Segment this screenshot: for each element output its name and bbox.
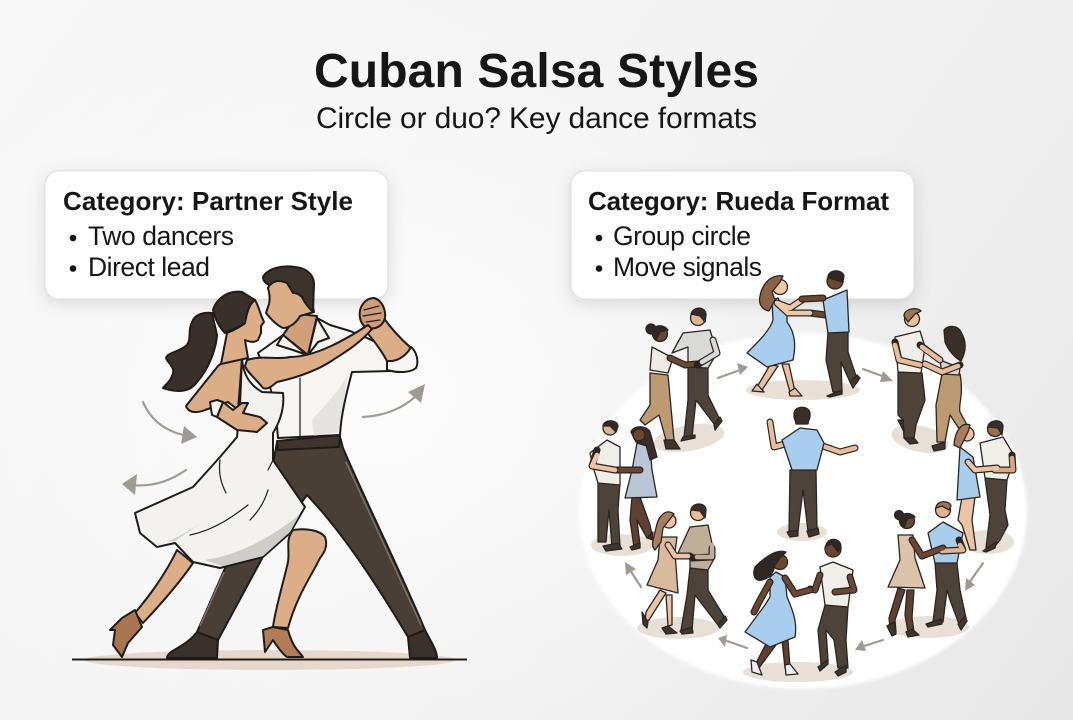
title: Cuban Salsa Styles bbox=[314, 45, 759, 98]
man hand on her waist bbox=[210, 400, 267, 432]
subtitle: Circle or duo? Key dance formats bbox=[316, 102, 757, 135]
bullet list: Move signals bbox=[613, 252, 762, 282]
couple: bottom left bbox=[637, 504, 727, 639]
couple: top centre bbox=[746, 271, 860, 400]
panel: rueda format card bbox=[571, 171, 914, 299]
card heading: Category: Partner Style bbox=[63, 186, 353, 216]
bullet list bbox=[596, 221, 762, 282]
man shirt bbox=[258, 318, 390, 438]
bullet list: Two dancers bbox=[88, 221, 234, 251]
woman dress bbox=[135, 358, 305, 568]
floor shadow and line bbox=[72, 650, 467, 670]
bullet list: Direct lead bbox=[88, 252, 210, 282]
bullet list: Group circle bbox=[613, 221, 751, 251]
illustration: partner couple bbox=[72, 266, 467, 670]
couple: top left bbox=[640, 308, 727, 457]
woman face and hair bbox=[213, 292, 264, 364]
leader in centre bbox=[770, 407, 855, 541]
card heading: Category: Rueda Format bbox=[588, 186, 889, 216]
woman legs and heels bbox=[110, 529, 326, 657]
illustration: rueda circle bbox=[579, 271, 1027, 689]
man neck, collar, face and hair bbox=[263, 266, 329, 355]
couple: top right bbox=[889, 309, 967, 458]
couple: left bbox=[590, 421, 657, 556]
couple: right lower bbox=[887, 502, 969, 638]
woman extended arm bbox=[245, 325, 372, 389]
couple: right upper bbox=[954, 421, 1015, 554]
man raised forearm and clasped hands bbox=[360, 298, 417, 372]
circulation arrows bbox=[625, 363, 983, 651]
panel: partner style card bbox=[45, 171, 388, 299]
white dance floor circle bbox=[579, 333, 1027, 689]
woman back, rear arm and ponytail bbox=[163, 313, 242, 412]
bullet list bbox=[70, 221, 234, 282]
man trousers and shoes bbox=[167, 435, 437, 658]
couple: bottom centre bbox=[743, 539, 854, 682]
motion arrows bbox=[122, 384, 425, 495]
